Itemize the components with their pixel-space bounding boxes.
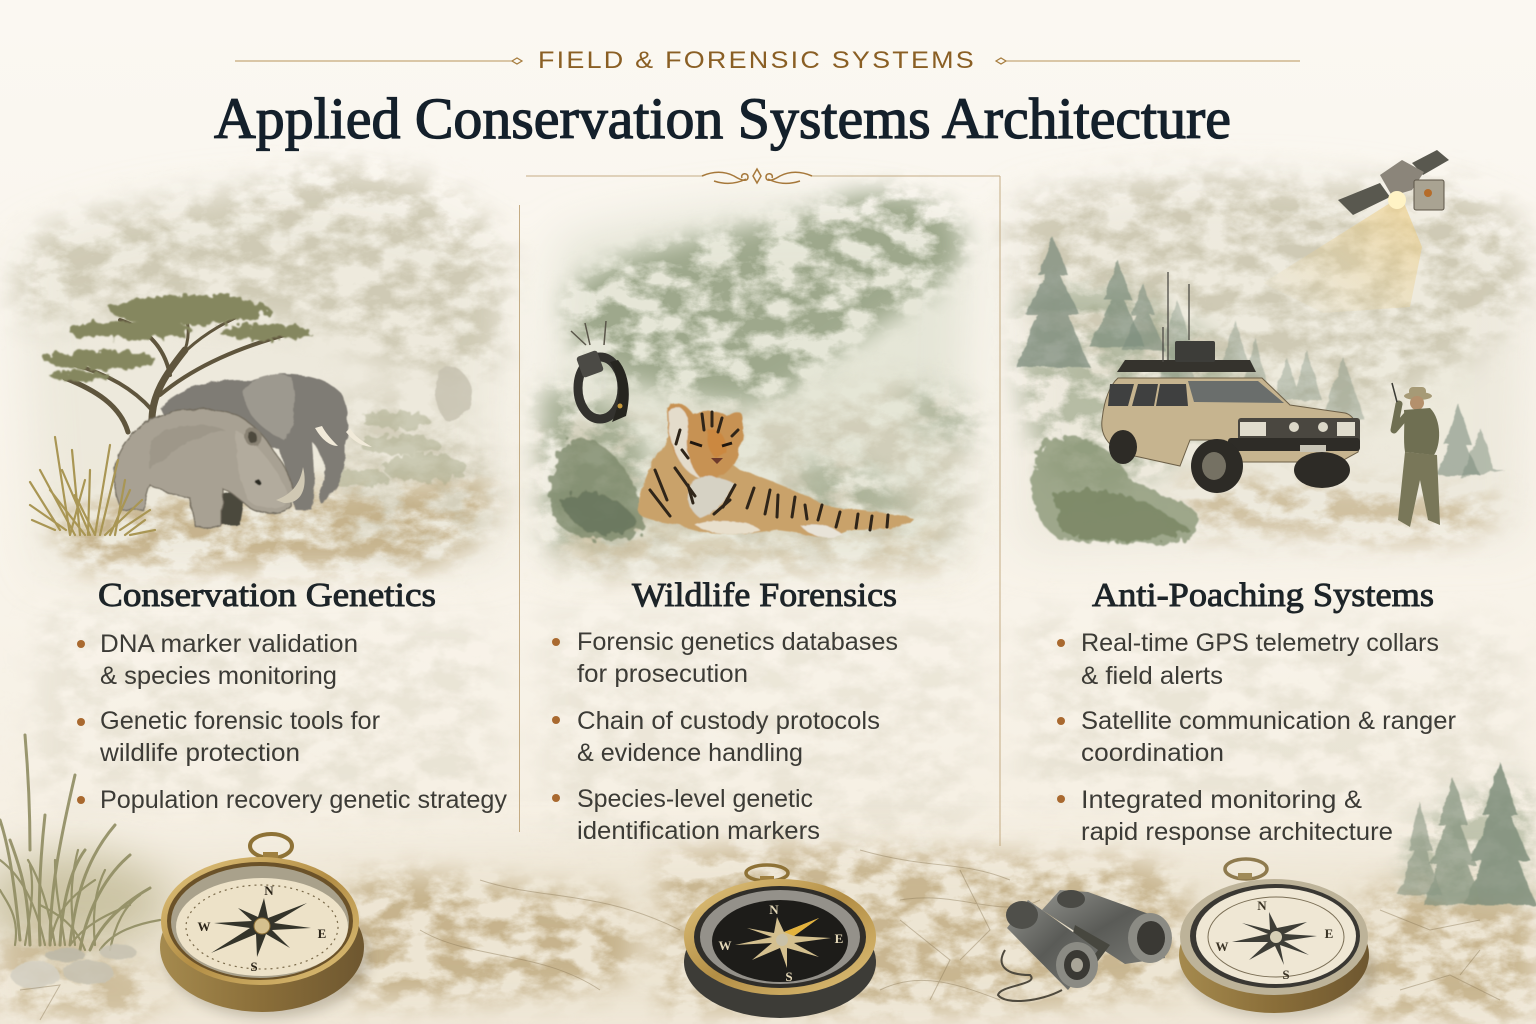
pines bottom right [1398,762,1536,905]
compass left: E [318,926,326,941]
heading: anti-poaching systems: Anti-Poaching Systems [1092,577,1434,614]
rhino [114,409,293,527]
background pines [1155,300,1365,420]
compass left [160,834,370,1018]
star [211,898,311,957]
compass center: N [769,902,779,917]
list: conservation genetics: Population recovery genetic strategy [100,786,507,814]
vehicle [1102,272,1360,493]
panel: wildlife forensics illustration [550,321,913,540]
compass right: W [1216,939,1228,954]
list: conservation genetics: & species monitoring [100,662,337,690]
map washes neutral [20,168,1530,840]
ring [746,865,788,881]
map fragment [435,366,473,421]
list: anti-poaching systems: coordination [1081,739,1224,767]
elephant tusks [315,426,372,447]
heading: conservation genetics: Conservation Genetics [98,577,436,614]
rhino horn [276,467,305,503]
compass left: N [264,883,274,898]
compass right: S [1282,967,1290,982]
heading: wildlife forensics: Wildlife Forensics [632,577,897,614]
list: anti-poaching systems: Real-time GPS telemetry collars [1081,629,1439,657]
compass left: S [250,959,258,974]
ring [250,834,292,858]
list: wildlife forensics: Chain of custody protocols [577,707,880,735]
tiger [637,403,913,538]
elephant [160,374,348,510]
grass tuft [30,437,155,535]
list: conservation genetics [77,630,507,814]
list: anti-poaching systems: Integrated monitoring & [1081,786,1362,814]
list: anti-poaching systems: & field alerts [1081,662,1223,690]
compass center: S [785,969,793,984]
star [1232,912,1317,965]
title: Applied Conservation Systems Architecture [214,86,1231,151]
list: wildlife forensics: & evidence handling [577,739,803,767]
compass center: E [835,931,843,946]
acacia tree [44,295,311,432]
cracked earth and map lines [20,850,1500,1020]
list: anti-poaching systems: rapid response architecture [1081,818,1393,846]
list: wildlife forensics: Forensic genetics databases [577,628,898,656]
list: wildlife forensics [552,628,898,845]
foliage [550,438,645,540]
ranger [1392,383,1440,527]
compass right: E [1325,926,1333,941]
list: conservation genetics: wildlife protection [99,739,300,767]
compass right [1179,859,1376,1018]
list: wildlife forensics: identification markers [577,817,820,845]
compass center: W [718,938,732,953]
map washes tan [0,477,1536,1024]
compass right: N [1257,898,1267,913]
compass left: W [198,919,210,934]
column dividers [520,176,1000,846]
grass bottom left [0,735,160,950]
panel: anti-poaching illustration [1016,150,1505,545]
ring [1225,859,1267,879]
undergrowth [1031,437,1199,545]
rocks [11,944,136,989]
list: anti-poaching systems [1057,629,1456,846]
tracking collar [571,321,629,422]
list: wildlife forensics: Species-level genetic [577,785,813,813]
list: conservation genetics: Genetic forensic tools for [100,707,380,735]
eyebrow heading [235,47,1300,74]
list: wildlife forensics: for prosecution [577,660,748,688]
list: anti-poaching systems: Satellite communication & ranger [1081,707,1456,735]
compass center [684,865,876,1018]
eyebrow heading: FIELD & FORENSIC SYSTEMS [538,47,976,74]
binoculars [998,890,1172,1001]
list: conservation genetics: DNA marker validation [100,630,358,658]
panel: conservation genetics illustration [30,295,473,535]
satellite beam [1263,198,1422,313]
map washes green [540,193,1536,900]
satellite [1338,150,1449,215]
ornament [702,169,812,183]
forest [1016,237,1505,478]
distant trees [332,411,467,487]
star [735,917,831,968]
